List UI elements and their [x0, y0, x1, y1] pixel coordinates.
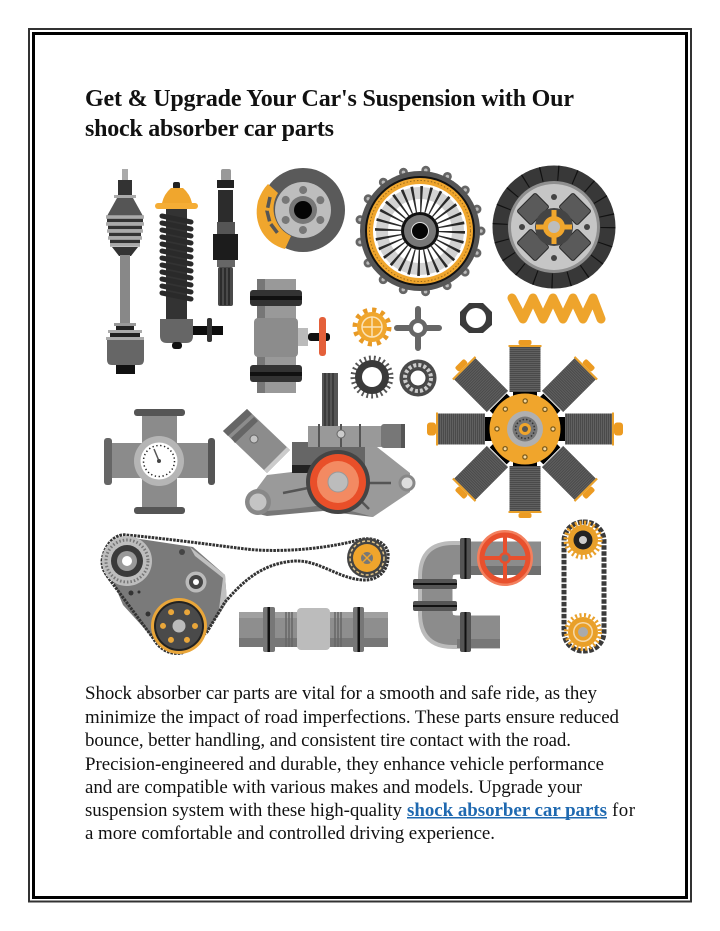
title [85, 86, 574, 142]
illustration: car parts [102, 166, 623, 654]
body paragraph: for [612, 800, 636, 821]
part: coil-over shock [155, 182, 223, 349]
part: vertical chain drive [564, 522, 604, 651]
part: straight coupling pipe [239, 607, 388, 652]
part: gauge cross fitting [104, 409, 215, 514]
link: shock absorber car parts: shock absorber car parts [407, 800, 607, 821]
part: elbow pipe with valve [413, 533, 541, 652]
body paragraph: and are compatible with various makes and models. Upgrade your [85, 777, 583, 798]
part: engine block [223, 373, 414, 517]
part: valve body [250, 279, 330, 393]
engine arms [427, 340, 623, 518]
part: yellow coil spring [512, 298, 601, 319]
part: splined shaft [213, 169, 238, 306]
body paragraph: a more comfortable and controlled driving experience. [85, 823, 495, 844]
part: brake disc [257, 168, 345, 252]
part: dark gear [353, 358, 391, 396]
part: radial engine [427, 340, 623, 518]
part: spoked clutch wheel [359, 170, 481, 292]
body paragraph: minimize the impact of road imperfections. These parts ensure reduced [85, 707, 620, 728]
body paragraph: suspension system with these high-quality [85, 800, 403, 821]
part: hex nut [460, 303, 492, 333]
engine hub [490, 394, 560, 464]
part: clutch disc [492, 166, 616, 288]
part: ball bearing [400, 360, 436, 396]
body paragraph: Precision-engineered and durable, they enhance vehicle performance [85, 754, 604, 775]
body paragraph: bounce, better handling, and consistent tire contact with the road. [85, 730, 571, 751]
title: shock absorber car parts [85, 116, 334, 142]
part: timing chain assembly [102, 535, 388, 654]
body paragraph: Shock absorber car parts are vital for a smooth and safe ride, as they [85, 683, 598, 704]
part: four-way joint [397, 309, 439, 348]
part: CV axle [106, 169, 144, 374]
part: small orange gear [355, 310, 389, 344]
title: Get & Upgrade Your Car's Suspension with Our [85, 86, 574, 112]
body paragraph [85, 683, 636, 844]
